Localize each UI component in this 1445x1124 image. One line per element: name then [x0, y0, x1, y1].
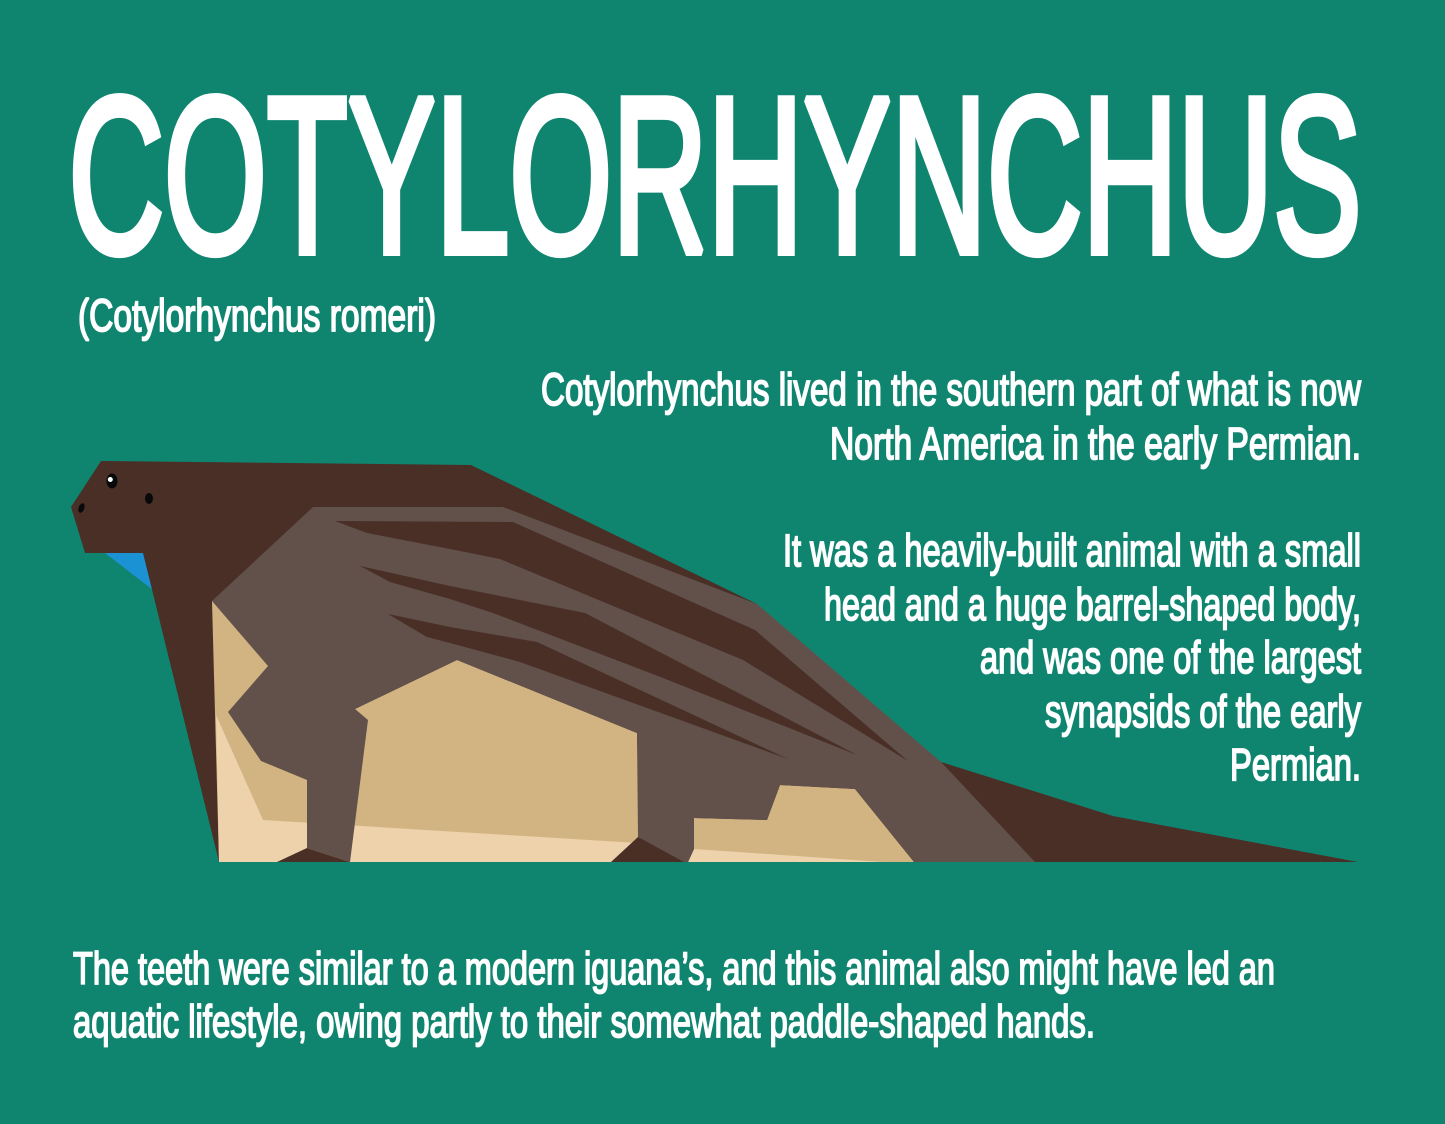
- text block: habitat: [541, 364, 1361, 469]
- text block: teeth and lifestyle: [73, 943, 1275, 1047]
- text block: body description: [783, 525, 1361, 790]
- icon: eye: [106, 474, 118, 488]
- illustration: cotylorhynchus: [71, 461, 1358, 862]
- icon: nostril: [77, 502, 86, 514]
- back stripes: [335, 521, 908, 761]
- body silhouette: [71, 461, 1358, 862]
- belly: cream: [216, 715, 883, 862]
- text block: body description: Permian.: [1230, 739, 1361, 790]
- feet: [277, 837, 684, 862]
- throat: blue: [105, 553, 153, 590]
- icon: ear hole: [145, 493, 153, 504]
- upper body: grey-brown: [212, 507, 1035, 862]
- text block: teeth and lifestyle: aquatic lifestyle, owing partly to their somewhat paddle-shaped hands.: [73, 996, 1095, 1047]
- belly: tan: [212, 601, 914, 862]
- subtitle: scientific name: (Cotylorhynchus romeri): [78, 290, 436, 341]
